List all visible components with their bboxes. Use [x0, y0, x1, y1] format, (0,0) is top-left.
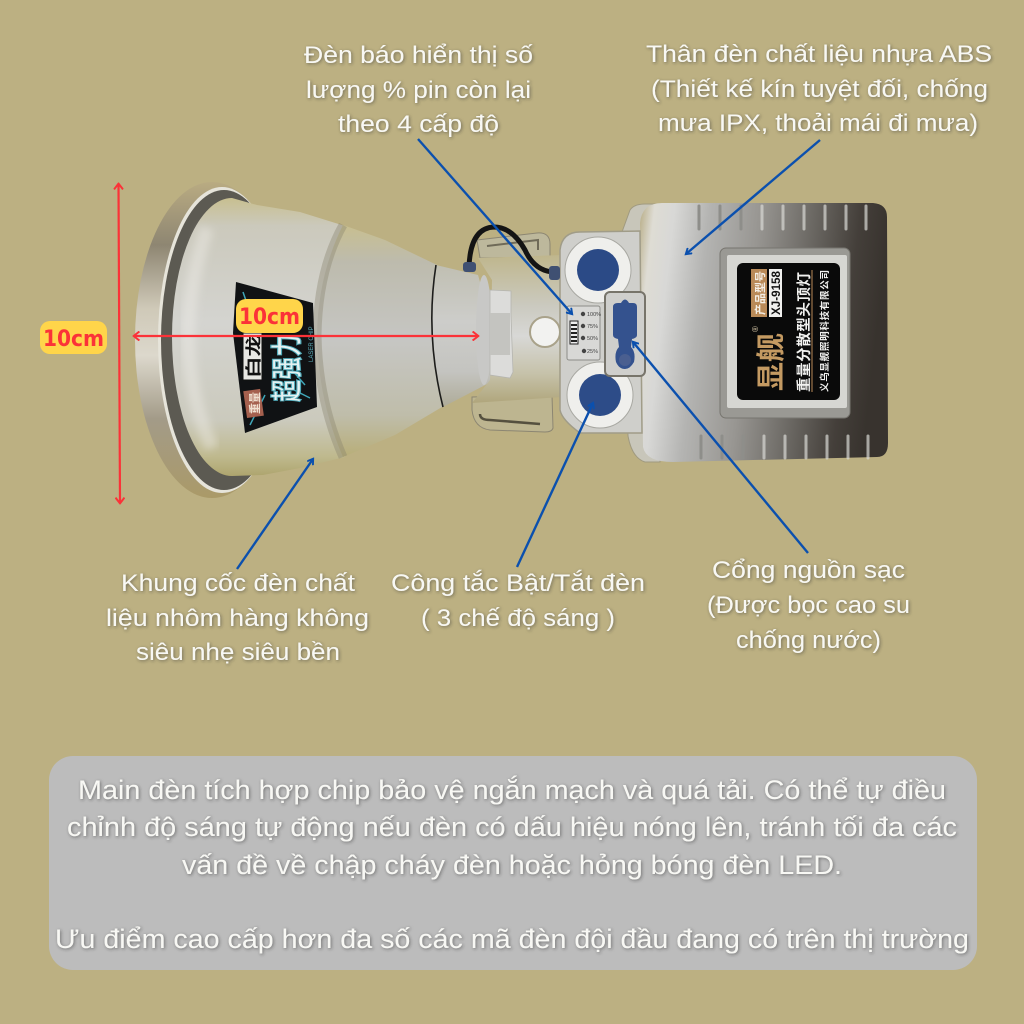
product label plate: ®: [751, 326, 760, 332]
upper strap bracket: [477, 233, 550, 258]
cup sticker: [233, 282, 317, 433]
callout: battery indicator: lượng % pin còn lại: [306, 77, 531, 104]
callout: cup frame: Khung cốc đèn chất: [121, 570, 355, 597]
callout: charging port: chống nước): [736, 627, 881, 654]
cup sticker: 重量: [247, 392, 262, 414]
body flange: [622, 204, 660, 462]
cup sticker: 白龙: [245, 335, 263, 378]
arrow: charging port: [633, 342, 808, 553]
product label plate: XJ-9158: [769, 271, 783, 315]
callout: cup frame: liệu nhôm hàng không: [106, 605, 369, 632]
top cooling ribs: [699, 206, 866, 229]
callout: body material: (Thiết kế kín tuyệt đối, chống: [651, 76, 988, 103]
mount plate between neck and controls: [472, 255, 562, 403]
arrow: battery indicator: [418, 139, 572, 314]
battery indicator panel: 75%: [587, 324, 598, 330]
top button: [565, 237, 631, 303]
dimension badge: length 10cm: 10cm: [239, 305, 300, 330]
cup sticker: 超强力: [269, 334, 305, 402]
callout: charging port: Cổng nguồn sạc: [712, 557, 905, 584]
label brand: 显舰: [755, 333, 788, 391]
arrow: cup frame: [237, 459, 313, 569]
callout: body material: [646, 41, 992, 137]
product label plate: [720, 248, 850, 418]
callout: battery indicator: theo 4 cấp độ: [338, 111, 499, 138]
label company: 义乌显舰照明科技有限公司: [819, 270, 831, 392]
charging port: [605, 292, 645, 376]
lamp cup rim: [135, 182, 289, 498]
callout: power switch: ( 3 chế độ sáng ): [421, 605, 615, 632]
callout: cup frame: siêu nhẹ siêu bền: [136, 639, 340, 666]
lower strap bracket: [472, 395, 553, 432]
cable: [463, 227, 560, 280]
label product name: 重量分散型头顶灯: [796, 272, 813, 392]
callout: battery indicator: Đèn báo hiển thị số: [304, 42, 533, 69]
power switch button: [567, 362, 633, 428]
battery indicator panel: [567, 306, 601, 360]
product label plate: 产品型号: [753, 271, 767, 315]
panel: chip protection note: [49, 756, 977, 970]
arrow: body material: [686, 140, 820, 254]
arrow: power switch: [517, 403, 593, 567]
control plate: [560, 231, 642, 433]
callout: charging port: [707, 557, 910, 654]
product photo: headlamp: [135, 182, 888, 498]
cup sticker: LASER CHIP: [309, 326, 315, 362]
battery indicator panel: 50%: [587, 336, 598, 342]
battery indicator panel: 25%: [587, 349, 598, 355]
main ABS body: [640, 203, 888, 462]
callout: cup frame: [106, 570, 369, 666]
dimension arrow: height: [118, 184, 120, 503]
label model tag: [751, 269, 767, 317]
panel text: vấn đề về chập cháy đèn hoặc hỏng bóng đèn LED.: [182, 850, 842, 880]
dimension arrow: length: [134, 335, 478, 337]
bottom cooling ribs: [701, 436, 868, 458]
callout: body material: Thân đèn chất liệu nhựa ABS: [646, 41, 992, 68]
callout: power switch: [391, 570, 645, 632]
callout: charging port: (Được bọc cao su: [707, 592, 910, 619]
lamp neck: [432, 265, 492, 407]
mount clamp: [490, 290, 513, 378]
callout: battery indicator: [304, 42, 533, 138]
panel text: [55, 774, 969, 954]
white knob: [530, 317, 560, 347]
callout: power switch: Công tắc Bật/Tắt đèn: [391, 570, 645, 597]
dimension badge: length 10cm: [236, 299, 303, 333]
lamp cup: aluminium frame: [172, 198, 442, 476]
battery indicator panel: 100%: [587, 312, 601, 318]
panel text: Main đèn tích hợp chip bảo vệ ngắn mạch và quá tải. Có thể tự điều: [78, 774, 946, 805]
dimension badge: height 10cm: 10cm: [43, 327, 104, 352]
callout: body material: mưa IPX, thoải mái đi mưa): [658, 110, 978, 137]
panel text: Ưu điểm cao cấp hơn đa số các mã đèn đội đầu đang có trên thị trường: [55, 924, 969, 954]
panel text: chỉnh độ sáng tự động nếu đèn có dấu hiệu nóng lên, tránh tối đa các: [67, 812, 957, 842]
